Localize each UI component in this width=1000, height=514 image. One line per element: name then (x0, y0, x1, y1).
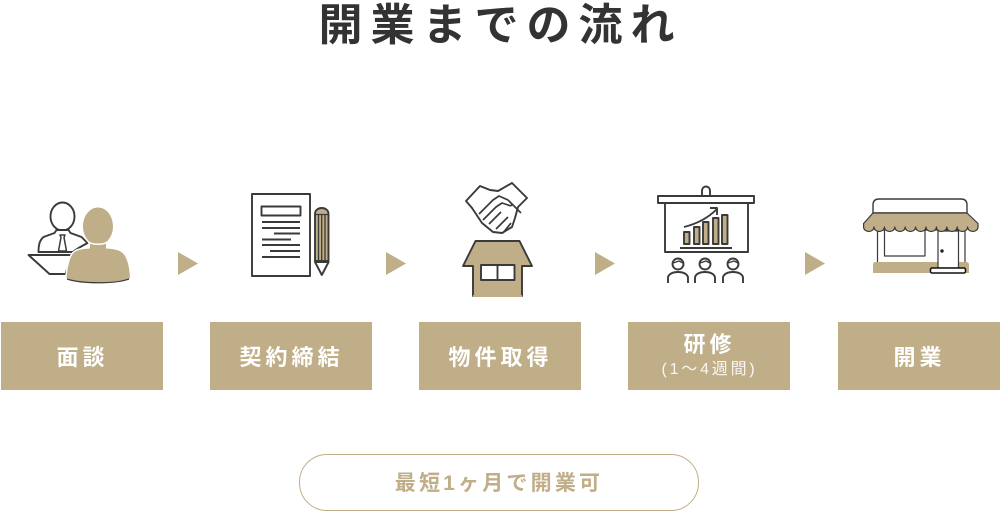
step: 契約締結 (210, 322, 372, 390)
icon: interview (28, 202, 130, 283)
step: 物件取得: 物件取得 (448, 345, 552, 370)
arrow 1 (178, 252, 198, 275)
step: 面談 (1, 322, 163, 390)
step: 研修: (1～4週間) (661, 361, 758, 378)
callout: 最短1ヶ月で開業可 (395, 472, 603, 495)
arrow 4 (805, 252, 825, 275)
step: 開業: 開業 (893, 345, 946, 370)
icon: contract and pencil (252, 194, 329, 276)
step: 物件取得 (419, 322, 581, 390)
icon: presentation (658, 186, 754, 283)
callout (299, 454, 699, 511)
step: 面談: 面談 (56, 345, 108, 370)
step: 契約締結: 契約締結 (239, 345, 344, 370)
step: 開業 (838, 322, 1000, 390)
step: 研修 (628, 322, 790, 390)
step: 研修: 研修 (683, 332, 736, 357)
arrow 3 (595, 252, 615, 275)
icon: handshake and house (463, 183, 532, 296)
title: 開業までの流れ (318, 1, 682, 50)
arrow 2 (386, 252, 406, 275)
icon: shop (864, 199, 978, 273)
